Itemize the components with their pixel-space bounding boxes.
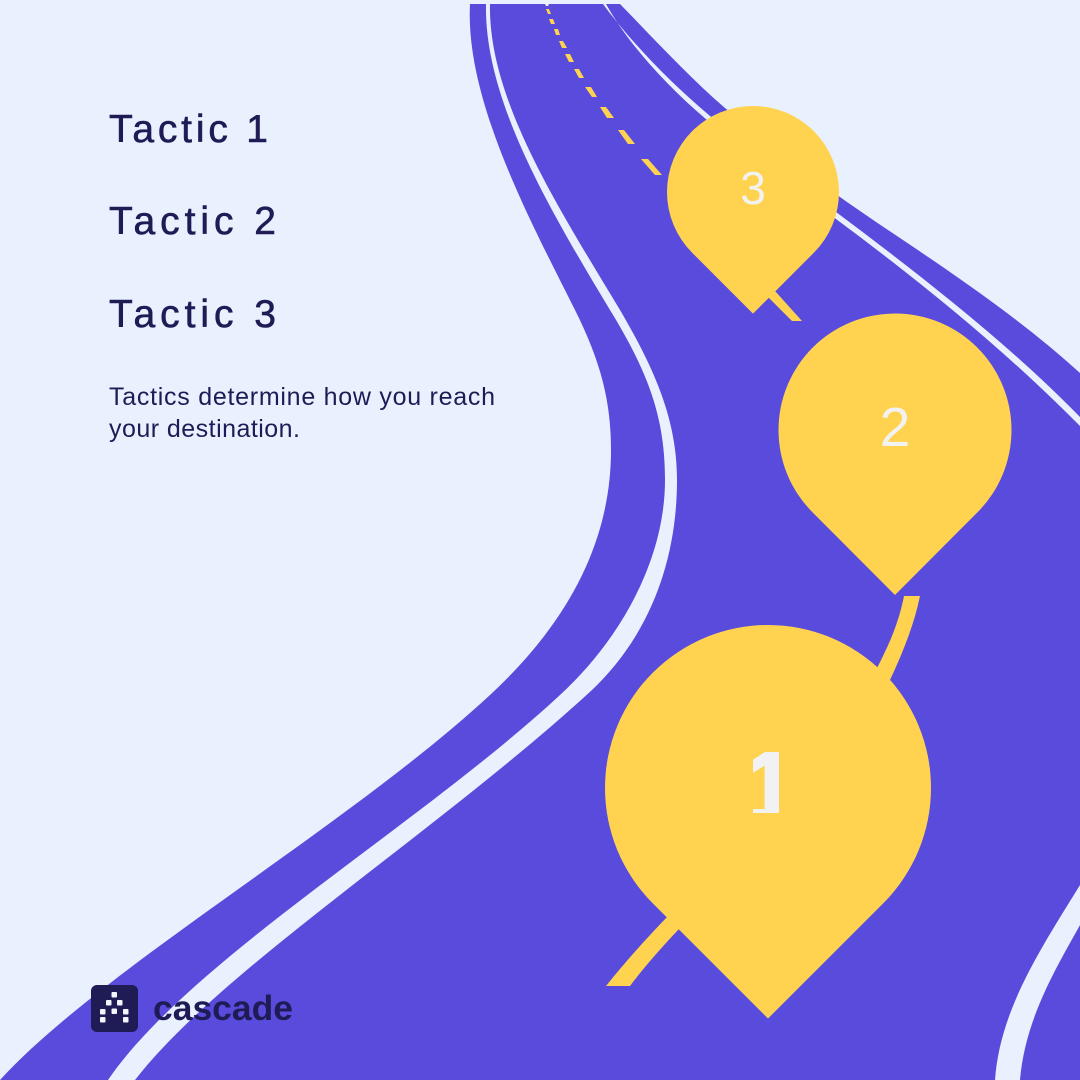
logo icon (91, 985, 138, 1032)
tactic list (109, 108, 276, 336)
tactic 3: Tactic 3 (109, 293, 276, 336)
tactic 1: Tactic 1 (109, 108, 268, 151)
description (109, 383, 495, 443)
pin 2 (778, 314, 1012, 595)
pin 1 (605, 625, 931, 1018)
pin 3 (667, 106, 839, 314)
right road edge line (603, 4, 1080, 426)
pin 3 number: 3 (740, 162, 766, 214)
left road edge line (108, 4, 677, 1080)
cascade logo (91, 985, 293, 1032)
tactic 2: Tactic 2 (109, 200, 276, 243)
centre dashed line (545, 4, 920, 986)
logo wordmark: cascade (153, 989, 293, 1028)
pin 1 number: 1 (743, 731, 797, 841)
description: Tactics determine how you reach (109, 383, 495, 411)
pin 2 number: 2 (880, 396, 910, 458)
bottom right road line (995, 885, 1080, 1080)
description: your destination. (109, 415, 300, 443)
